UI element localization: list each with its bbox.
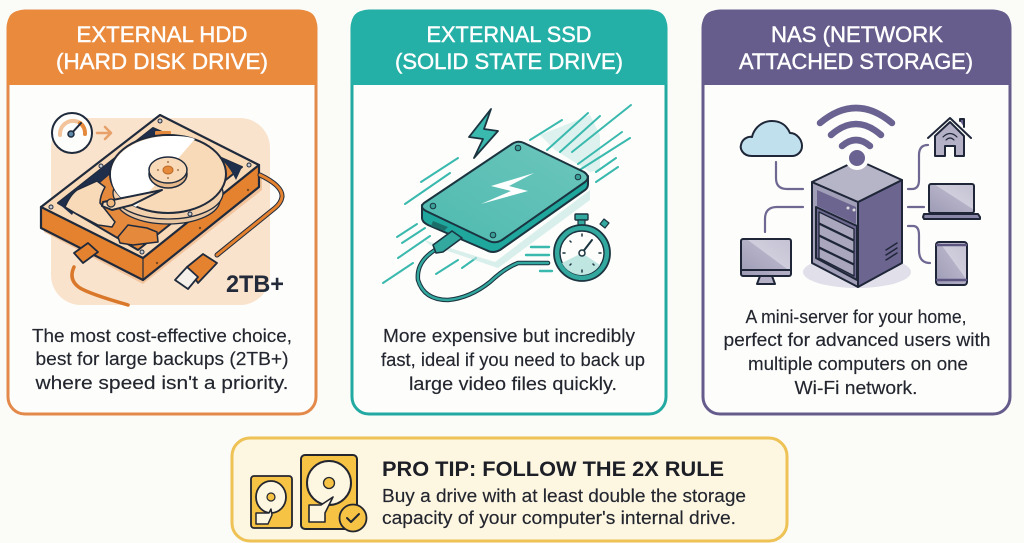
icon: server [803,160,911,288]
description: SSD [381,325,645,394]
text: pro tip body: capacity of your computer's internal drive. [382,507,736,528]
bolt above [469,109,498,158]
description: SSD: fast, ideal if you need to back up [381,349,645,370]
description: HDD: The most cost-effective choice, [32,325,292,346]
icon: cloud [741,121,802,156]
description: HDD: best for large backups (2TB+) [36,348,288,369]
header: external HDD: (HARD DISK DRIVE) [56,49,268,74]
icon: monitor [741,239,791,284]
header: NAS [702,10,1011,85]
illustration: open hard disk drive [41,113,284,305]
illustration: NAS network [741,108,980,288]
description: NAS: multiple computers on one [748,353,968,374]
header: external HDD [7,10,317,85]
header: external SSD: EXTERNAL SSD [426,22,592,47]
icon: laptop [923,184,980,219]
description: NAS: perfect for advanced users with [724,329,990,350]
screws [49,119,251,254]
SSD body [424,190,590,268]
description: HDD: where speed isn't a priority. [34,372,288,393]
USB plug [187,254,217,283]
speed lines [540,115,600,172]
header: external SSD [351,10,667,85]
platter [116,176,220,224]
header: NAS: ATTACHED STORAGE) [739,49,973,74]
panel: NAS [702,10,1011,414]
label: 2TB+: 2TB+ [226,271,284,298]
header: NAS: NAS (NETWORK [771,22,943,47]
heading: pro tip: PRO TIP: FOLLOW THE 2X RULE [382,458,724,481]
icon: two hard drives with check [251,455,366,532]
icon: tablet [936,242,967,285]
description: SSD: large video files quickly. [409,373,617,394]
header: external SSD: (SOLID STATE DRIVE) [395,49,623,74]
description: NAS: A mini-server for your home, [746,306,966,327]
text: pro tip body [382,485,746,528]
icon: wifi [820,108,892,170]
panel: external SSD [351,10,667,414]
cable [418,250,548,300]
description: HDD [32,325,292,393]
callout: pro tip [232,438,787,541]
header: external HDD: EXTERNAL HDD [76,22,248,47]
stopwatch [575,214,588,220]
left cable [72,267,128,305]
drive case [44,175,262,284]
panel: external HDD [7,10,317,414]
icon: speed gauge [52,113,111,153]
illustration: SSD with speed lines [383,105,631,300]
bolt on SSD [481,173,534,204]
actuator arm [65,181,115,227]
description: NAS [724,306,990,398]
text: pro tip body: Buy a drive with at least double the storage [382,485,746,506]
USB cable [217,175,282,255]
lower magnet plate [118,225,158,245]
description: NAS: Wi-Fi network. [794,377,918,398]
description: SSD: More expensive but incredibly [383,325,636,346]
connector lines [765,145,930,263]
icon: house [928,118,971,156]
